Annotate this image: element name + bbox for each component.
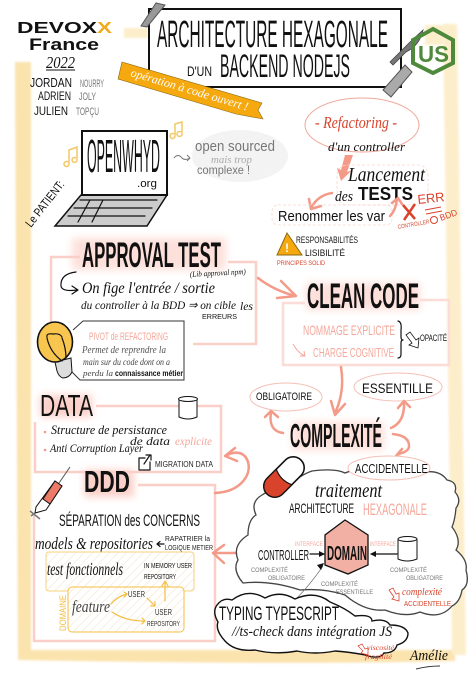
box: test fonctionnels [46,552,194,591]
scalpel [390,30,423,65]
complexité heading [290,417,384,454]
panel: approval test [51,236,256,344]
speakers: ADRIEN [38,89,71,103]
panel: approval test: APPROVAL TEST [82,236,221,275]
box: domaine: REPOSITORY [147,619,180,628]
callout: pivot de refactoring: Permet de reprendre la [81,345,166,356]
essentielle bubble: ESSENTILLE [362,380,433,396]
obligatoire bubble: OBLIGATOIRE [256,391,312,403]
speech bubble: open sourced: complexe ! [197,163,250,177]
callout: pivot de refactoring: perdu la [82,368,113,378]
cloud: traitement architecture hexagonale: traitement [315,480,382,502]
accidentelle bubble: ACCIDENTELLE [355,461,428,476]
cloud: typing typescript [215,593,408,661]
warning icon [277,233,302,255]
panel: clean code: OPACITÉ [420,333,447,343]
panel: clean code [283,277,449,365]
tape top left [141,3,165,27]
cloud: traitement architecture hexagonale: INTERFACE [295,541,324,548]
label: le patient: Le PATIENT: [22,178,67,230]
speakers: JULIEN [34,104,68,118]
icon: lightbulb [38,322,72,378]
cloud: traitement architecture hexagonale: COMPLEXITÉ [390,565,428,574]
warning text: RESPONSABILITÉS [296,235,358,245]
icon: pill [259,452,309,502]
refactoring ellipse: - Refactoring - [315,113,397,132]
accidentelle bubble [348,456,430,480]
title box: D'UN [187,63,212,79]
panel: data: Anti Corruption Layer [49,441,143,455]
panel: data: MIGRATION DATA [155,459,213,469]
speakers: NOURRY [80,78,104,90]
squiggle arrow [174,155,190,161]
speakers: JORDAN [30,75,72,90]
DEVOXX France logo [17,20,113,72]
text: OPENWHYD [87,130,160,182]
speech bubble: open sourced: open sourced [195,138,275,155]
cloud: typing typescript: TYPING TYPESCRIPT [219,604,339,625]
panel: clean code: CHARGE COGNITIVE [313,345,394,360]
DEVOXX France logo: France [29,35,99,54]
laptop [55,130,167,226]
refactoring ellipse: d'un controller [328,139,406,154]
cloud: typing typescript: fragilité [365,652,393,661]
box: test fonctionnels: REPOSITORY [144,574,176,581]
refactoring ellipse [305,98,419,154]
speakers: JOLY [79,91,96,103]
box: test fonctionnels: IN MEMORY USER [144,563,192,570]
title box [149,9,401,87]
tape bottom right [383,65,412,97]
panel: ddd: LOGIQUE METIER [165,545,213,552]
laptop: .org [137,178,157,190]
warning text: PRINCIPES SOLID [277,260,325,267]
panel: approval test: On fige l'entrée / sortie [82,280,215,297]
lancement des tests: Lancement [347,164,425,186]
renommer les var: Renommer les var [278,208,385,225]
panel: ddd [30,464,215,641]
callout: pivot de refactoring: connaissance métier [115,368,184,378]
panel: ddd: DDD [84,464,130,499]
panel: clean code: NOMMAGE EXPLICITE [303,322,395,338]
box: test fonctionnels: test fonctionnels [47,559,123,579]
panel: ddd: SÉPARATION des CONCERNS [59,511,200,530]
diagram: hexagon domain [325,520,368,574]
panel: data: de data [130,434,170,448]
signature: Amélie [409,648,448,664]
DEVOXX France logo: DEVOX [17,20,98,37]
cloud: traitement architecture hexagonale: COMPLEXITÉ [251,565,289,574]
lancement des tests: TESTS [358,184,413,204]
callout: pivot de refactoring: PIVOT de REFACTORING [89,331,168,343]
speech bubble: open sourced [192,130,288,182]
icon: syringe [30,467,70,519]
box: domaine: DOMAINE [58,595,68,631]
cloud: traitement architecture hexagonale: complexité [402,587,443,598]
cloud: typing typescript: //ts-check dans intégration JS [231,624,392,640]
arrow approval to clean code [258,278,296,298]
essentielle bubble [354,373,442,401]
panel: data: DATA [40,388,93,423]
panel: approval test: du controller à la BDD ⇒ on cible [81,298,237,312]
cloud: traitement architecture hexagonale: ESSENTIELLE [336,589,374,596]
arrow refactoring to tests [337,155,353,181]
cloud: traitement architecture hexagonale: ACCIDENTELLE [404,599,451,608]
error note: CONTROLLER [397,219,430,231]
cloud: typing typescript: viscosité [367,644,395,652]
error note: BDD [438,207,459,223]
speech bubble: open sourced: mais trop [211,155,252,166]
box: domaine: feature [72,597,110,616]
panel: ddd: models & repositories [35,534,153,553]
NodeJS logo: US [418,41,449,67]
NodeJS logo [413,29,453,73]
panel: approval test: (Lib approval npm) [190,267,246,279]
warning text [277,235,358,267]
cloud: traitement architecture hexagonale: CONTROLLER [258,547,309,564]
banner: opération à code ouvert ! [129,65,250,114]
lancement des tests: des [335,189,353,205]
panel: data [35,388,221,472]
warning text: LISIBILITÉ [305,248,345,258]
obligatoire bubble [250,383,322,411]
speakers: TOPÇU [76,106,99,118]
speakers [30,75,104,118]
arrows from complexité [265,401,410,458]
cloud: traitement architecture hexagonale: OBLIGATOIRE [406,575,444,582]
cloud: traitement architecture hexagonale: ARCHITECTURE [289,500,354,516]
arrow clean code to complexité [331,367,345,415]
arrow var to tests [390,198,402,216]
DEVOXX France logo: 2022 [46,53,75,72]
error note: ERR [417,189,445,207]
cloud: traitement architecture hexagonale: COMPLEXITÉ [321,579,359,588]
panel: ddd: RAPATRIER la [165,534,211,543]
panel: approval test: ERREURS [202,312,237,321]
callout: pivot de refactoring: main sur du code dont on a [83,357,170,367]
panel: data: explicite [175,434,213,448]
icon: database right [398,536,417,561]
diagram: hexagon domain: DOMAIN [327,543,367,565]
music notes [64,122,182,166]
cloud: traitement architecture hexagonale [236,469,467,615]
callout: pivot de refactoring [72,321,184,380]
warning icon: ! [285,241,289,255]
arrow tests to rename [309,193,332,209]
lancement des tests [335,164,428,205]
box: domaine: USER [128,590,145,599]
signature [409,648,448,669]
error note [397,189,459,231]
box: domaine [58,581,184,632]
panel: approval test: les [240,299,253,313]
panel: data: Structure de persistance [51,422,167,437]
arrows to data and ddd [213,448,249,563]
cloud: traitement architecture hexagonale: OBLIGATOIRE [268,575,306,582]
DEVOXX France logo: X [97,20,113,37]
cloud: traitement architecture hexagonale: INTERFACE [370,541,396,548]
box: domaine: USER [155,608,172,617]
icon: database [178,396,198,419]
